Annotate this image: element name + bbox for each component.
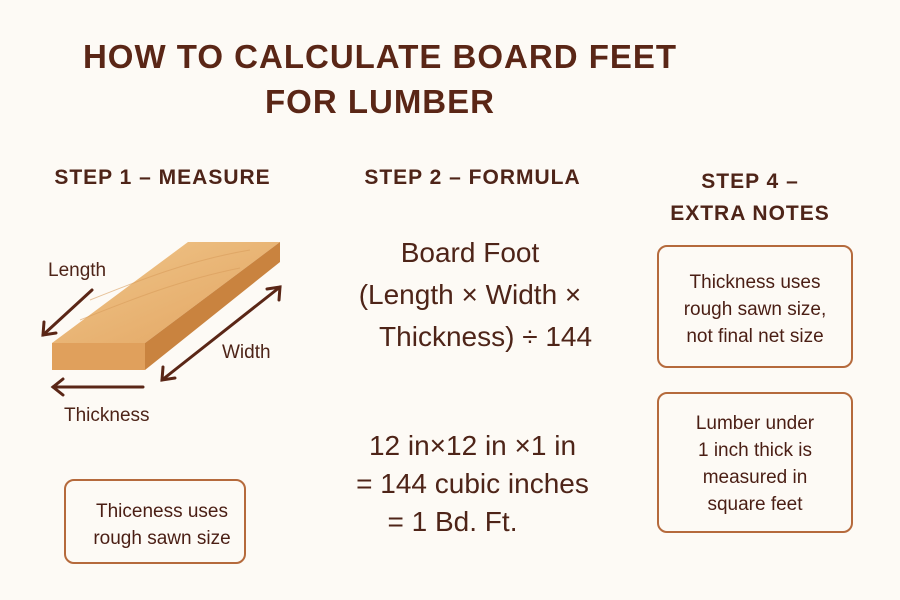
illustration: board with dimension arrows: Width (222, 342, 271, 363)
formula (359, 237, 592, 352)
heading: step 4: STEP 4 – (701, 170, 799, 193)
note box 1: not final net size (686, 326, 824, 347)
title: FOR LUMBER (265, 83, 495, 120)
heading: step 1: STEP 1 – MEASURE (54, 166, 271, 189)
heading: step 2: STEP 2 – FORMULA (364, 166, 581, 189)
note box 1: Thickness uses (690, 272, 820, 293)
formula: Thickness) ÷ 144 (379, 321, 592, 352)
illustration: board with dimension arrows (41, 242, 282, 426)
illustration: board with dimension arrows: Length (48, 260, 106, 281)
note box 2: square feet (707, 494, 803, 515)
note box 1: rough sawn size, (684, 299, 826, 320)
note box 1 (657, 245, 853, 368)
example calculation: 12 in×12 in ×1 in (369, 430, 576, 461)
note box 2: measured in (703, 467, 807, 488)
formula: Board Foot (401, 237, 539, 268)
heading: step 4 (670, 170, 830, 225)
note box: step 1 (64, 479, 246, 564)
example calculation (356, 430, 589, 537)
illustration: board with dimension arrows: Thickness (64, 405, 150, 426)
example calculation: = 144 cubic inches (356, 468, 589, 499)
note box 2: Lumber under (696, 413, 814, 434)
note box 2 (657, 392, 853, 533)
title: HOW TO CALCULATE BOARD FEET (83, 38, 677, 75)
note box: step 1: rough sawn size (93, 528, 231, 549)
note box 2: 1 inch thick is (698, 440, 812, 461)
heading: step 4: EXTRA NOTES (670, 202, 830, 225)
example calculation: = 1 Bd. Ft. (388, 506, 517, 537)
title (83, 38, 677, 120)
formula: (Length × Width × (359, 279, 581, 310)
note box: step 1: Thiceness uses (96, 501, 228, 522)
